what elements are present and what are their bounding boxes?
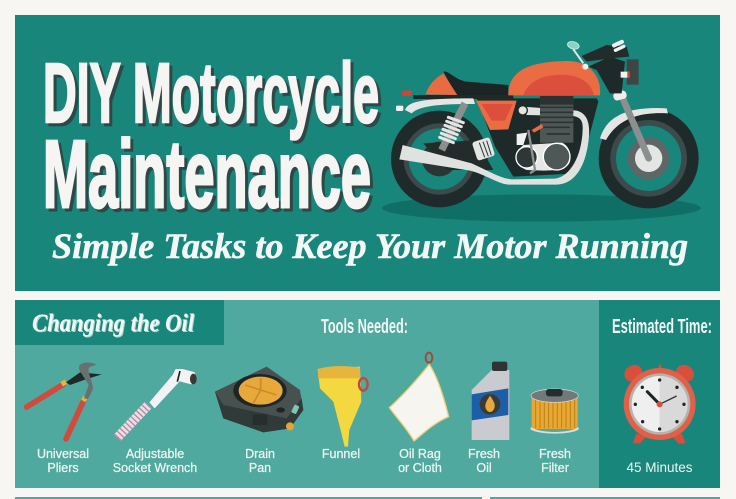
- tool: oil rag: [389, 353, 449, 475]
- section heading: Changing the Oil: [32, 310, 194, 337]
- tool: fresh oil: [468, 362, 509, 475]
- seat: [443, 71, 508, 96]
- tool: fresh filter: Filter: [541, 461, 569, 475]
- text: 45 minutes: 45 Minutes: [626, 460, 693, 475]
- title: [43, 46, 379, 228]
- title: Maintenance: [43, 121, 371, 228]
- tool: fresh oil: Oil: [476, 461, 492, 475]
- panel: changing the oil: [15, 300, 599, 488]
- tool: oil rag: or Cloth: [398, 461, 442, 475]
- tool: funnel: [318, 366, 368, 461]
- tool: fresh filter: Fresh: [539, 447, 571, 461]
- panel: next section right: [490, 497, 720, 499]
- icon: alarm clock: [621, 361, 697, 443]
- rear frame and fender: [413, 95, 513, 99]
- heading: tools needed: Tools Needed:: [321, 316, 408, 338]
- tool: fresh filter: [531, 389, 579, 475]
- tool: fresh oil: Fresh: [468, 447, 500, 461]
- tool: drain pan: [215, 367, 303, 475]
- panel: estimated time: [599, 300, 720, 488]
- icon: motorcycle: [382, 39, 701, 222]
- tool: drain pan: Pan: [249, 461, 271, 475]
- rear wheel: [391, 111, 488, 207]
- fork and headlight: [608, 65, 649, 158]
- shock absorber: [442, 103, 465, 150]
- frame: [477, 98, 598, 177]
- panel: header: [15, 15, 720, 291]
- tool: funnel: Funnel: [322, 447, 360, 461]
- section heading: [15, 300, 224, 345]
- tool: oil rag: Oil Rag: [399, 447, 441, 461]
- tool: universal pliers: Pliers: [47, 461, 79, 475]
- tool: adjustable socket wrench: Socket Wrench: [113, 461, 197, 475]
- exhaust: [399, 107, 589, 185]
- front wheel: [599, 108, 699, 208]
- fuel tank: [508, 61, 600, 95]
- tool: adjustable socket wrench: Adjustable: [126, 447, 184, 461]
- tool: universal pliers: [27, 362, 102, 475]
- front fender: [600, 108, 668, 140]
- subtitle: Simple Tasks to Keep Your Motor Running: [52, 226, 688, 266]
- panel: next section left: [15, 497, 482, 499]
- foot peg guard: [472, 137, 495, 161]
- handlebar and mirror: [582, 45, 629, 62]
- tool: universal pliers: Universal: [37, 447, 89, 461]
- title: DIY Motorcycle: [43, 46, 379, 140]
- engine cases: [517, 143, 570, 171]
- tool: adjustable socket wrench: [113, 368, 197, 475]
- side panel: [476, 101, 517, 130]
- tool: drain pan: Drain: [245, 447, 275, 461]
- engine cylinder: [540, 96, 573, 143]
